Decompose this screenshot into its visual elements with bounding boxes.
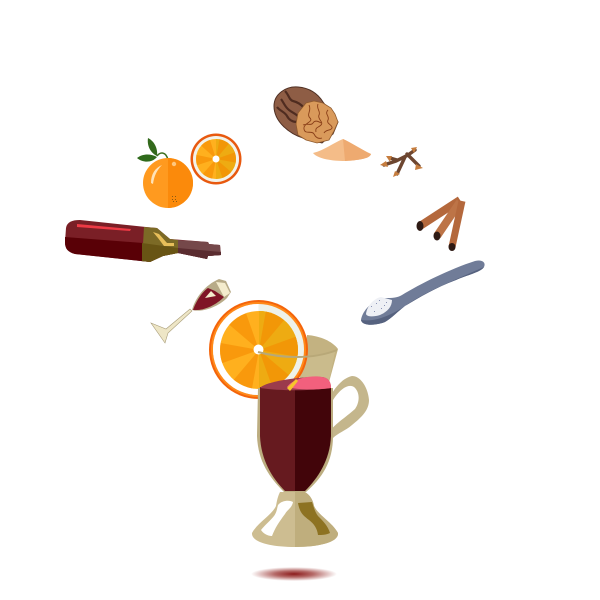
icon: slice string and highlight [258,350,337,391]
icon: wine bottle [65,220,221,262]
shadow [251,567,337,581]
handle [328,376,369,446]
icon: glass behind the slice [300,335,338,386]
icon: cinnamon sticks [416,200,462,251]
icon: mulled wine mug [252,376,369,547]
icon: nutmeg [274,87,338,143]
liquid [260,387,295,491]
icon: orange with leaves [137,138,193,208]
liquid surface [260,377,331,390]
foot [252,492,338,547]
icon: wine glass [151,279,231,343]
glass body [257,388,333,492]
icon: small orange slice [190,134,242,184]
icon: large orange slice [209,300,308,399]
icon: cloves [380,147,423,177]
icon: spoon with sugar [361,260,485,325]
icon: ground nutmeg pile [313,139,371,161]
